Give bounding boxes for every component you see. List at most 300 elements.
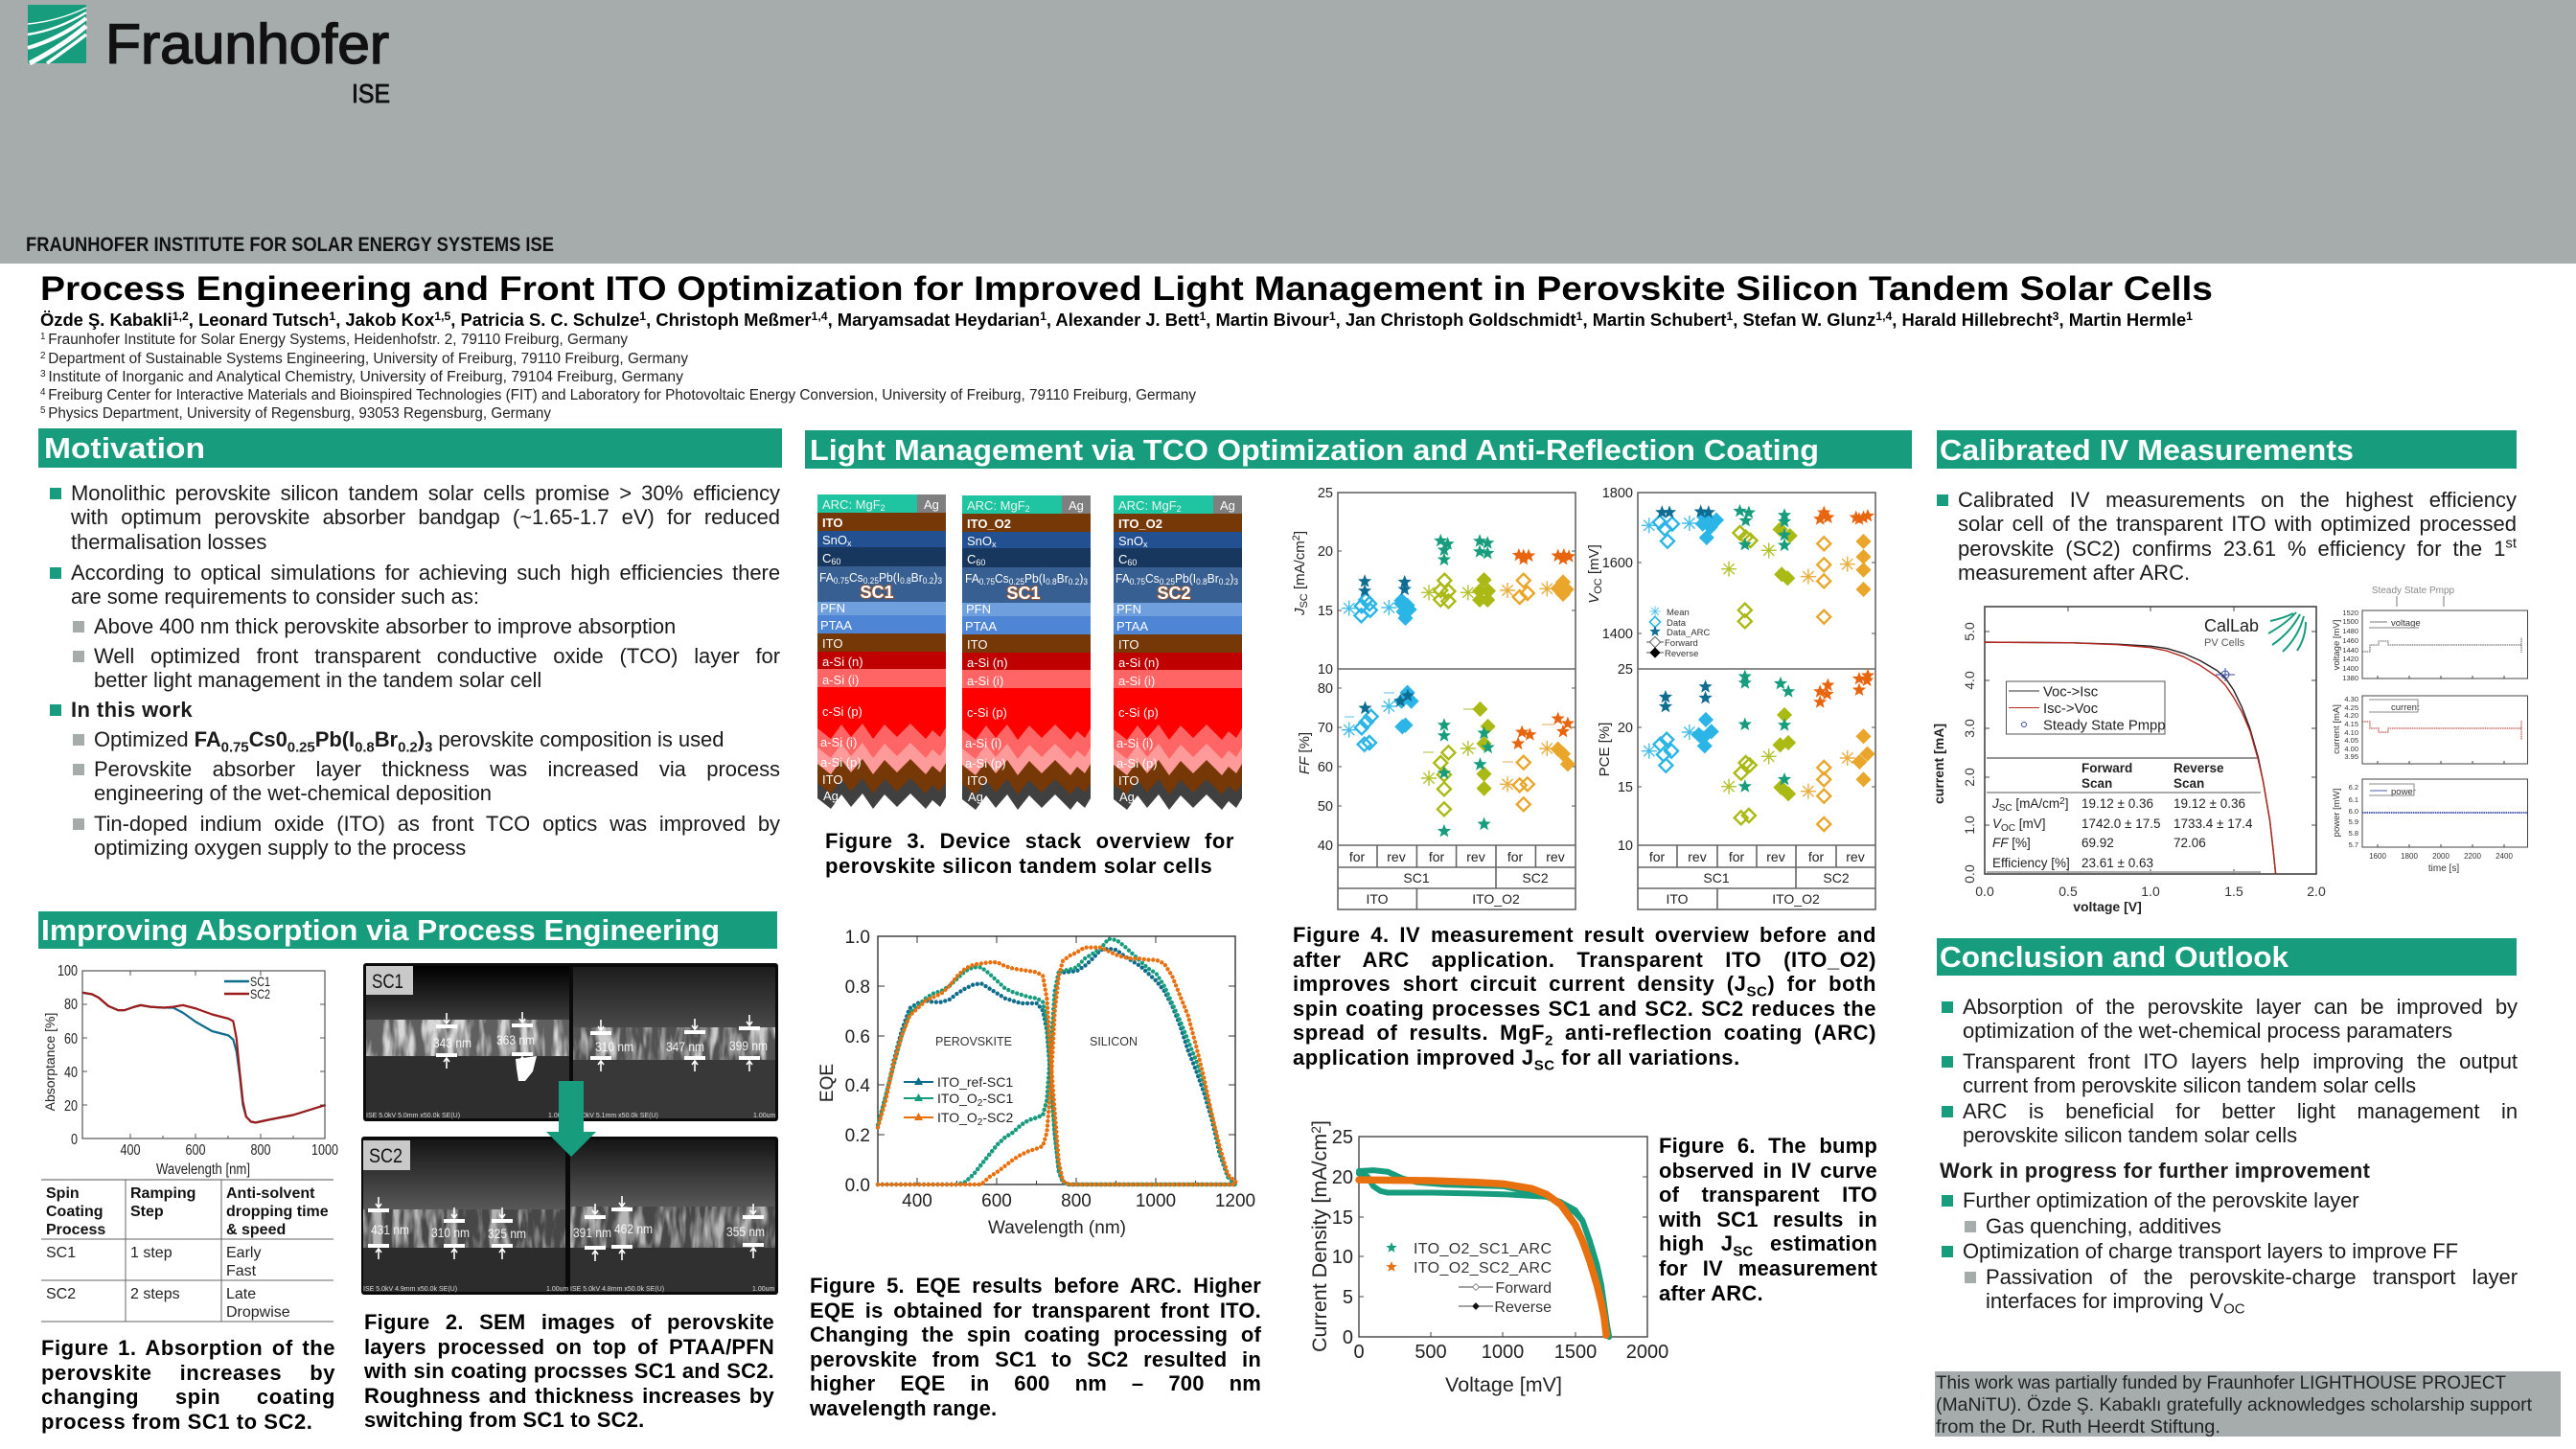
bullet: ARC: ARC is beneficial for better light management in <box>1963 1098 2518 1123</box>
stack: ITO_O2 SC1: ITO_O2 <box>967 517 1011 531</box>
stack: ITO SC1: ITO <box>822 772 842 787</box>
chart: CalLab IV curve: 0.0 <box>1962 864 1977 884</box>
stack: ITO_O2 SC2: a-Si (n) <box>1118 656 1160 670</box>
figure 4 caption: application improved JSC for all variations. <box>1293 1046 1740 1073</box>
chart: bump IV curve figure 6: ] <box>1308 1120 1331 1126</box>
stack: ITO SC1: Pb(I <box>879 570 900 585</box>
legend: ITO_O2_SC2_ARC <box>1414 1260 1552 1276</box>
authors: 1 <box>1199 310 1207 323</box>
chart: steady state plots: 1600 <box>2369 852 2386 861</box>
SEM image: SC2 <box>361 1137 778 1295</box>
authors: , Martin Bivour <box>1206 310 1329 330</box>
panel frames and tables <box>1338 493 1875 909</box>
chart: EQE figure 5: PEROVSKITE <box>935 1035 1012 1048</box>
stack: ITO_O2 SC1: 2 <box>1025 504 1030 514</box>
chart: steady state plots: 6.0 <box>2349 807 2358 816</box>
stack: ITO_O2 SC2: ITO_O2 <box>1118 517 1162 531</box>
authors: 1,4 <box>812 310 828 323</box>
figure 6 caption: after ARC. <box>1659 1281 1763 1305</box>
stack: ITO SC1: 60 <box>831 557 840 566</box>
SEM image: SC1: 1.00um <box>753 1113 776 1119</box>
stack: ITO_O2 SC1 <box>962 495 1091 810</box>
chart: absorptance figure 1: 80 <box>64 997 78 1013</box>
legend box: Isc->Voc <box>2043 702 2099 717</box>
table lines <box>1987 757 2257 759</box>
chart: CalLab IV curve: voltage [V] <box>2073 899 2142 914</box>
chart: steady state plots: 1440 <box>2342 646 2358 655</box>
sub-bullet: gas quenching: Gas quenching, additives <box>1986 1213 2221 1238</box>
bullet: charge transport: Optimization of charge transport layers to improve FF <box>1963 1238 2458 1263</box>
table: spin coating process: SC2 <box>46 1286 76 1302</box>
legend: Forward <box>1665 638 1698 649</box>
results table: [mV] <box>2015 816 2046 831</box>
logo ISE: ISE <box>352 79 390 108</box>
chart: CalLab IV curve: 4.0 <box>1962 671 1977 690</box>
stack: ITO_O2 SC2: Pb(I <box>1175 571 1196 586</box>
chart: IV results figure 4: SC2 <box>1823 870 1850 886</box>
header band with logo <box>0 0 2576 264</box>
stack: ITO_O2 SC1: Ag <box>968 790 983 804</box>
chart: IV results figure 4: 15 <box>1618 780 1633 795</box>
results table: Efficiency [%] <box>1992 856 2070 870</box>
authors: 1 <box>329 310 336 323</box>
bullet: efficiency promise: with optimum perovskite absorber bandgap (~1.65-1.7 eV) for reduced <box>71 505 780 529</box>
chart: EQE figure 5: 0.2 <box>845 1126 870 1146</box>
SEM image: SC2: ISE 5.0kV 4.8mm x50.0k SE(U) <box>570 1286 664 1293</box>
curve: SC1 forward <box>1359 1173 1609 1337</box>
chart: steady state plots: 4.05 <box>2344 736 2358 745</box>
stack: ITO SC1: a-Si (p) <box>820 755 862 770</box>
stack: ITO_O2 SC2: a-Si (p) <box>1116 756 1158 770</box>
chart: steady state plots: 6.2 <box>2349 783 2358 792</box>
legend box <box>2007 681 2166 734</box>
SEM image: SC2: 391 nm <box>573 1225 611 1240</box>
heading: Conclusion and Outlook: Conclusion and Outlook <box>1940 940 2289 974</box>
chart: steady state plots: 4.00 <box>2344 745 2358 753</box>
figure 1 caption: perovskite increases by <box>41 1361 335 1385</box>
stack: ITO_O2 SC2: 3 <box>1233 577 1238 586</box>
figure 1 caption: process from SC1 to SC2. <box>41 1410 312 1434</box>
legend: 2 <box>978 1098 983 1109</box>
stack: ITO_O2 SC1: ITO <box>967 637 987 652</box>
chart: steady state plots: 1420 <box>2342 655 2358 663</box>
results table: Reverse <box>2174 761 2224 775</box>
chart: steady state plots: 1520 <box>2342 609 2358 617</box>
chart: bump IV curve figure 6: 25 <box>1332 1127 1353 1148</box>
legend box: Voc->Isc <box>2043 684 2099 700</box>
figure 5 caption: Figure 5. EQE results before ARC. Higher <box>810 1274 1261 1298</box>
axis titles: 2 <box>1291 535 1302 540</box>
results table: 72.06 <box>2174 836 2206 850</box>
chart: steady state plots: 5.9 <box>2349 817 2358 826</box>
chart: IV results figure 4: for <box>1649 849 1666 864</box>
chart: steady state plots: 1400 <box>2342 664 2358 673</box>
affiliations: 3 <box>40 369 48 380</box>
stack: ITO_O2 SC1: ) <box>1079 571 1083 586</box>
sub-bullet: thickness: Perovskite absorber layer thickness was increased via process <box>94 757 780 780</box>
stack: ITO SC1: a-Si (i) <box>822 673 859 687</box>
panel: conclusion bullets <box>1940 995 2518 1317</box>
curve: SC1 reverse <box>1359 1170 1609 1337</box>
bullet: perovskite optimization: Further optimization of the perovskite layer <box>1963 1188 2359 1211</box>
stack: ITO SC1: ITO <box>822 636 842 651</box>
authors: , Maryamsadat Heydarian <box>828 310 1040 330</box>
chart: EQE figure 5: 1200 <box>1215 1191 1255 1211</box>
SEM image: SC2: 462 nm <box>614 1221 653 1236</box>
heading: Calibrated IV Measurements: Calibrated IV Measurements <box>1940 433 2354 467</box>
authors: Özde Ş. Kabakli <box>40 310 170 330</box>
stack: ITO_O2 SC1: ARC: MgF <box>967 498 1025 513</box>
bullet: efficiency promise: thermalisation losses <box>71 529 266 554</box>
curve: ITO_O2-SC1 silicon <box>878 939 1236 1184</box>
chart: IV results figure 4: for <box>1729 849 1745 864</box>
chart: bump IV curve figure 6: 5 <box>1343 1287 1353 1308</box>
stack: ITO_O2 SC1: 0.2 <box>1069 577 1079 586</box>
figure 1 caption: changing spin coating <box>41 1385 335 1409</box>
chart: IV results figure 4: 15 <box>1318 604 1333 619</box>
sub-bullet: ITO optics <box>94 811 780 861</box>
axis titles: SC <box>1299 593 1310 609</box>
stack: ITO_O2 SC2: FA <box>1116 571 1131 586</box>
icon: Fraunhofer logo mark <box>28 5 86 63</box>
arrow: SC1 to SC2 <box>546 1081 596 1157</box>
chart: steady state plots: power <box>2391 787 2416 797</box>
chart: IV results figure 4: rev <box>1387 849 1406 864</box>
table: spin coating process: Step <box>130 1204 164 1220</box>
chart: steady state plots: 4.20 <box>2344 711 2358 720</box>
stack: ITO SC1: PFN <box>820 601 845 615</box>
chart: IV results figure 4: 50 <box>1318 799 1333 815</box>
heading: Light Management: Light Management via TCO Optimization and Anti-Reflection Coating <box>810 433 1819 467</box>
stack: ITO SC1: x <box>847 539 852 548</box>
stack: ITO_O2 SC1: 0.8 <box>1046 577 1057 586</box>
table: spin coating process: & speed <box>226 1222 286 1238</box>
SEM image: SC1: ISE 5.0kV 5.0mm x50.0k SE(U) <box>366 1113 460 1119</box>
stack: ITO SC1: SnO <box>822 533 847 547</box>
bullet: calibrated result: solar cell of the transparent ITO with optimized processed <box>1958 512 2517 536</box>
chart: steady state plots: 1500 <box>2342 617 2358 626</box>
chart: steady state plots: current [mA] <box>2332 704 2342 754</box>
SEM image: SC1: 363 nm <box>496 1032 535 1047</box>
bullet: transparent ITO: current from perovskite silicon tandem solar cells <box>1963 1073 2416 1097</box>
chart: steady state plots: time [s] <box>2428 863 2459 874</box>
panel: motivation <box>38 428 782 860</box>
chart: IV results figure 4: SC1 <box>1703 870 1730 886</box>
chart: bump IV curve figure 6 <box>1308 1120 1668 1396</box>
table: spin coating process <box>41 1179 334 1322</box>
bullet: requirements: are some requirements to consider such as: <box>71 585 479 609</box>
authors: , Alexander J. Bett <box>1046 310 1199 330</box>
funding note: This work was partially funded by Fraunhofer LIGHTHOUSE PROJECT <box>1936 1372 2506 1393</box>
stack: ITO_O2 SC1: 0.75 <box>979 577 995 586</box>
axis titles <box>1291 531 1613 776</box>
chart: IV results figure 4: SC2 <box>1522 870 1549 886</box>
legend: -SC2 <box>982 1110 1013 1125</box>
axis titles: OC <box>1593 578 1604 594</box>
chart: IV results figure 4: for <box>1507 849 1524 864</box>
figure 6 caption: of transparent ITO <box>1659 1183 1877 1207</box>
stack: ITO_O2 SC1: PFN <box>966 602 991 616</box>
stack: ITO_O2 SC1: Br <box>1057 571 1069 586</box>
legend: ITO_ref-SC1 <box>937 1074 1013 1090</box>
legend: 2 <box>978 1117 983 1128</box>
curve: ITO_O2-SC1 perovskite <box>878 967 1236 1184</box>
bullet: absorption <box>1963 995 2518 1043</box>
chart: steady state plots: voltage <box>2391 618 2421 629</box>
chart: steady state plots: 1800 <box>2401 852 2418 861</box>
stack: ITO_O2 SC2: 60 <box>1127 558 1137 567</box>
chart: IV results figure 4: 60 <box>1318 760 1333 775</box>
heading: Calibrated IV Measurements <box>1937 430 2517 469</box>
SEM image: SC1: 310 nm <box>595 1039 633 1054</box>
chart: absorptance figure 1: 60 <box>64 1031 78 1047</box>
chart: EQE figure 5: 800 <box>1061 1191 1092 1211</box>
figure 6 caption: for IV measurement <box>1659 1256 1877 1280</box>
chart: CalLab IV curve: current [mA] <box>1931 724 1946 804</box>
chart: IV results figure 4: rev <box>1546 849 1565 864</box>
CalLab mark <box>2204 612 2306 652</box>
chart: steady state plots: 2000 <box>2432 852 2450 861</box>
scatter markers <box>1349 511 1868 831</box>
chart: steady state plots: 5.8 <box>2349 829 2358 838</box>
SEM image: SC1 <box>363 963 778 1121</box>
chart: IV results figure 4: 1800 <box>1602 486 1633 501</box>
heading: Motivation <box>38 428 782 468</box>
table: spin coating process: dropping time <box>226 1204 329 1220</box>
chart: steady state plots: 1480 <box>2342 627 2358 635</box>
authors: 1 <box>639 310 646 323</box>
figure 5 caption: higher EQE in 600 nm – 700 nm <box>810 1371 1261 1395</box>
authors: , Patricia S. C. Schulze <box>450 310 639 330</box>
chart: IV results figure 4: 10 <box>1318 662 1333 678</box>
axis titles: FF [%] <box>1297 732 1313 774</box>
chart: CalLab IV curve: 0.0 <box>1975 884 1994 899</box>
stack: ITO SC1: 2 <box>881 503 886 513</box>
chart: bump IV curve figure 6: 0 <box>1343 1327 1353 1348</box>
figure 3 caption <box>825 829 1234 878</box>
figure 5 caption <box>810 1274 1261 1420</box>
stack: ITO_O2 SC2: C <box>1118 552 1127 566</box>
chart: EQE figure 5: 1000 <box>1136 1191 1176 1211</box>
chart: absorptance figure 1: SC1 <box>250 974 270 989</box>
results table: 1733.4 ± 17.4 <box>2174 816 2253 831</box>
subheading: work in progress: Work in progress for further improvement <box>1940 1158 2370 1183</box>
stack: ITO_O2 SC2: SC2 <box>1157 584 1191 603</box>
stack: ITO SC1: ITO <box>822 516 842 530</box>
chart: steady state plots: 4.30 <box>2344 695 2358 703</box>
chart: CalLab IV curve: 0.5 <box>2058 884 2078 899</box>
bullet: calibrated result: perovskite (SC2) confirms 23.61 % efficiency for the 1st <box>1958 535 2517 560</box>
funding note <box>1935 1371 2561 1438</box>
table: spin coating process: Late <box>226 1286 256 1302</box>
stack: ITO_O2 SC1: 3 <box>1083 577 1088 586</box>
authors: , Martin Schubert <box>1582 310 1726 330</box>
chart: EQE figure 5: 0.6 <box>845 1027 870 1047</box>
chart: bump IV curve figure 6: 500 <box>1414 1342 1447 1363</box>
authors: 1,4 <box>1875 310 1893 323</box>
stack: ITO_O2 SC2: x <box>1143 540 1148 549</box>
chart: steady state plots: 1380 <box>2342 674 2358 682</box>
SEM image: SC1: 347 nm <box>666 1039 704 1054</box>
authors: , Martin Hermle <box>2058 310 2186 330</box>
chart: steady state plots: power [mW] <box>2332 789 2342 837</box>
sub-bullet: TCO layer: Well optimized front transparent conductive oxide (TCO) layer for <box>94 644 780 667</box>
chart: EQE figure 5: 400 <box>902 1191 932 1211</box>
stack: ITO_O2 SC1: FA <box>965 571 980 586</box>
sub-bullet: TCO layer: better light management in the tandem solar cell <box>94 668 541 692</box>
sub-bullet: passivation <box>1986 1265 2518 1313</box>
chart: EQE figure 5: 0.0 <box>845 1176 870 1196</box>
affiliations: Institute of Inorganic and Analytical Chemistry, University of Freiburg, 79104 Freiburg, Germany <box>48 369 683 385</box>
stack: ITO SC1: 3 <box>937 576 942 586</box>
table: spin coating process: Process <box>46 1222 105 1238</box>
chart: steady state plots: 3.95 <box>2344 752 2358 761</box>
figure 5 caption: Changing the spin coating processing of <box>810 1322 1261 1346</box>
SEM image: SC2: 310 nm <box>431 1225 470 1240</box>
chart: steady state plots: voltage [mV] <box>2332 620 2342 670</box>
stack: ITO_O2 SC1: SnO <box>967 534 992 548</box>
stack: ITO SC1: PTAA <box>820 618 852 632</box>
chart: steady state plots: 1460 <box>2342 636 2358 645</box>
heading: Motivation: Motivation <box>44 431 205 465</box>
bullet: ARC: perovskite silicon tandem solar cells <box>1963 1123 2297 1147</box>
SEM image: SC2: 1.00um <box>752 1286 775 1293</box>
stack: ITO_O2 SC1: a-Si (n) <box>967 656 1008 670</box>
authors: 1,2 <box>172 310 189 323</box>
figure 4 caption: spread of results. MgF2 anti-reflection coating (ARC) <box>1293 1021 1876 1049</box>
title: Process Engineering and Front ITO Optimization for Improved Light Management in Perovskite Silicon Tandem Solar Cells <box>40 270 2213 308</box>
stack: ITO_O2 SC2: a-Si (i) <box>1118 674 1155 688</box>
bullet: transparent ITO: Transparent front ITO layers help improving the output <box>1963 1048 2518 1073</box>
chart: IV results figure 4: SC1 <box>1403 870 1430 886</box>
sub-bullet: TCO layer <box>94 644 780 692</box>
stack: ITO_O2 SC1: ITO <box>967 773 987 788</box>
chart: bump IV curve figure 6: 10 <box>1332 1247 1353 1268</box>
bullet: transparent ITO <box>1963 1048 2518 1098</box>
logo wordmark: Fraunhofer <box>105 13 389 76</box>
chart: absorptance figure 1: 600 <box>186 1142 206 1159</box>
funding note: from the Dr. Ruth Heerdt Stiftung. <box>1936 1416 2220 1438</box>
chart: bump IV curve figure 6: 15 <box>1332 1208 1353 1229</box>
diagram: device stacks <box>817 494 1242 810</box>
sub-bullet: ITO optics: optimizing oxygen supply to the process <box>94 836 466 860</box>
curve: ITO_ref-SC1 silicon <box>878 949 1236 1184</box>
results table <box>1991 761 2253 870</box>
figure 2 caption: Figure 2. SEM images of perovskite <box>364 1310 774 1334</box>
chart: EQE figure 5: Wavelength (nm) <box>988 1218 1126 1238</box>
table: spin coating process: Ramping <box>130 1185 196 1202</box>
stack: ITO_O2 SC1: SC1 <box>1006 584 1041 603</box>
chart: IV results figure 4: for <box>1349 849 1366 864</box>
chart: bump IV curve figure 6: 1000 <box>1482 1342 1524 1363</box>
chart: IV results figure 4: ITO <box>1666 891 1689 907</box>
stack: ITO SC1 <box>817 494 946 809</box>
stack: ITO SC1: FA <box>819 570 835 585</box>
stack: ITO_O2 SC2: Br <box>1208 571 1219 586</box>
stack: ITO SC1: C <box>822 551 831 565</box>
chart: IV results figure 4: 25 <box>1318 486 1333 501</box>
SEM image: SC2: ISE 5.0kV 4.9mm x50.0k SE(U) <box>363 1286 457 1293</box>
chart: IV results figure 4: ITO_O2 <box>1472 891 1520 907</box>
SEM image: SC1: 5.0kV 5.1mm x50.0k SE(U) <box>577 1113 658 1119</box>
authors: , Jan Christoph Goldschmidt <box>1336 310 1576 330</box>
authors: , Stefan W. Glunz <box>1733 310 1875 330</box>
chart: CalLab IV curve: 2.0 <box>2307 884 2326 899</box>
affiliations: 1 <box>40 332 48 342</box>
results table: ] <box>2065 796 2068 811</box>
authors: , Leonard Tutsch <box>189 310 329 330</box>
authors: 1 <box>1726 310 1734 323</box>
legend: Data_ARC <box>1667 628 1711 638</box>
stack: ITO_O2 SC2: Cs <box>1145 571 1160 586</box>
chart: IV results figure 4: for <box>1808 849 1825 864</box>
stack: ITO_O2 SC1: a-Si (i) <box>965 736 1001 750</box>
chart: steady state plots: 2200 <box>2464 852 2481 861</box>
chart: absorptance figure 1: 0 <box>71 1132 78 1148</box>
stack: ITO_O2 SC1: Ag <box>1069 498 1084 513</box>
stack: ITO_O2 SC1: PTAA <box>965 619 997 633</box>
affiliations <box>40 332 1196 422</box>
chart: IV results figure 4 <box>1291 486 1876 910</box>
authors: 1 <box>1329 310 1336 323</box>
stack: ITO SC1: 0.8 <box>900 576 911 586</box>
axis titles: J <box>1292 608 1308 616</box>
stack: ITO SC1: 0.25 <box>863 576 879 586</box>
figure 2 caption: Roughness and thickness increases by <box>364 1384 774 1408</box>
results table: FF [%] <box>1992 836 2031 850</box>
chart: steady state plots <box>2332 586 2528 874</box>
results table: 69.92 <box>2082 836 2114 850</box>
axis titles: PCE [%] <box>1597 723 1613 776</box>
chart: absorptance figure 1: SC2 <box>250 986 270 1001</box>
bullet: efficiency promise <box>71 481 780 554</box>
stack: ITO_O2 SC1: a-Si (i) <box>967 674 1003 688</box>
SEM image: SC1: 399 nm <box>729 1038 768 1053</box>
bullet: calibrated result: Calibrated IV measurements on the highest efficiency <box>1958 487 2517 512</box>
chart: EQE figure 5: 1.0 <box>845 928 870 948</box>
chart: IV results figure 4: 20 <box>1318 544 1333 560</box>
authors <box>40 310 2193 330</box>
figure 4 caption: after ARC application. Transparent ITO (ITO_O2) <box>1293 948 1876 972</box>
results table: Scan <box>2082 776 2112 791</box>
figure 6 caption: high JSC estimation <box>1659 1231 1877 1260</box>
stack: ITO SC1: Br <box>911 570 923 585</box>
affiliations: Physics Department, University of Regensburg, 93053 Regensburg, Germany <box>48 405 551 422</box>
chart: bump IV curve figure 6: 1500 <box>1554 1342 1597 1363</box>
CalLab mark: PV Cells <box>2204 637 2245 649</box>
SEM image: SC1: 1.00um <box>548 1113 571 1119</box>
table: spin coating process: 2 steps <box>130 1286 180 1302</box>
results table: Forward <box>2082 761 2132 775</box>
stack: ITO_O2 SC1: C <box>967 552 976 566</box>
chart: EQE figure 5: SILICON <box>1090 1035 1138 1048</box>
chart: IV results figure 4: ITO_O2 <box>1772 891 1820 907</box>
chart: IV results figure 4: 25 <box>1618 662 1633 678</box>
bullet: efficiency promise: Monolithic perovskite silicon tandem solar cells promise > 30% efficiency <box>71 481 780 504</box>
sub-bullet: thickness <box>94 757 780 805</box>
heading: Improving Absorption: Improving Absorption via Process Engineering <box>41 913 720 947</box>
chart: CalLab IV curve: 3.0 <box>1962 719 1977 738</box>
affiliations: Department of Sustainable Systems Engineering, University of Freiburg, 79110 Freiburg, Germany <box>48 351 688 367</box>
stack: ITO_O2 SC1: c-Si (p) <box>967 705 1007 720</box>
chart: absorptance figure 1: 100 <box>58 963 78 979</box>
chart: IV results figure 4: 40 <box>1318 839 1333 854</box>
bullet: calibrated result: measurement after ARC. <box>1958 561 2190 585</box>
chart: absorptance figure 1: Wavelength [nm] <box>156 1162 250 1178</box>
sub-bullet: absorber thickness: Above 400 nm thick perovskite absorber to improve absorption <box>94 613 676 638</box>
label: SC2: SC2 <box>369 1145 402 1167</box>
chart: bump IV curve figure 6: Current Density [mA/cm <box>1308 1134 1331 1352</box>
